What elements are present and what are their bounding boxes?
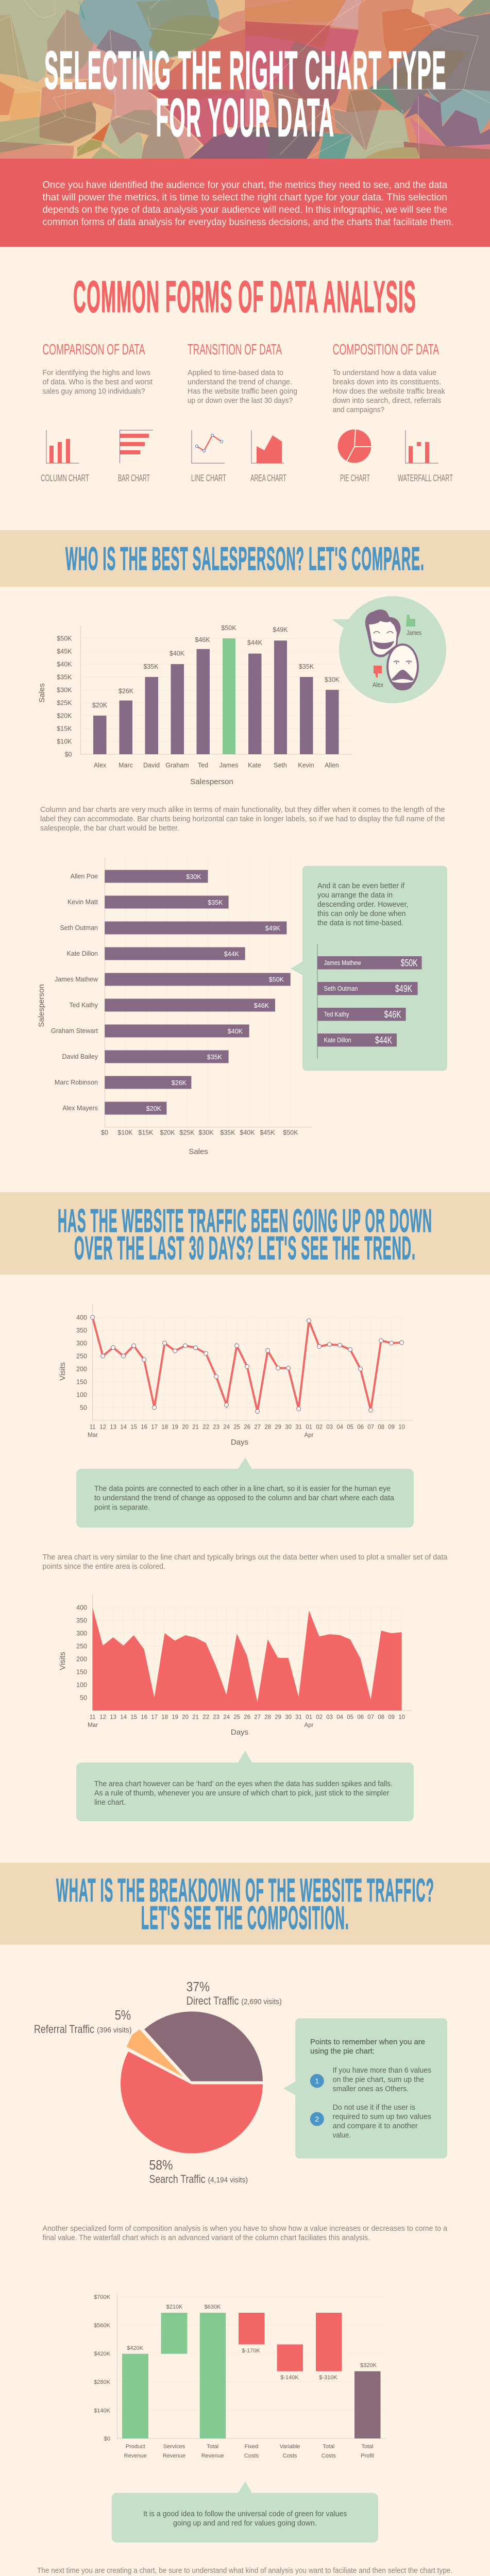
callout text: this can only be done when — [317, 909, 406, 918]
label: search traffic: (4,194 visits) — [208, 2176, 248, 2184]
line chart: visits per day: 300 — [76, 1340, 87, 1347]
area chart: visits per day — [58, 1595, 413, 1737]
area chart: visits per day: 12 — [99, 1715, 106, 1721]
column chart: sales by salesperson: Graham — [165, 761, 189, 769]
line chart: visits per day: 24 — [223, 1424, 230, 1430]
column chart: sales by salesperson: Allen — [325, 761, 339, 769]
area chart: visits per day: 100 — [76, 1682, 87, 1689]
line chart: visits per day: 13 — [110, 1424, 116, 1430]
area chart: visits per day: 300 — [76, 1630, 87, 1637]
column: comparison of data — [42, 342, 153, 396]
column: composition of data: How does the website traffic break — [333, 387, 445, 396]
column chart: sales by salesperson: $10K — [57, 738, 72, 745]
waterfall chart: revenue, costs and profit: $-170K — [242, 2348, 260, 2354]
area chart: visits per day: 20 — [182, 1715, 189, 1721]
column chart: sales by salesperson: $35K — [299, 663, 314, 670]
text: column vs bar comparison: label they can accommodate. Bar charts being horizontal can take in longer labels, so if we had to display the full name of the — [40, 815, 445, 823]
column: composition of data: down into search, direct, referrals — [333, 396, 441, 405]
waterfall chart: revenue, costs and profit: Costs — [244, 2453, 259, 2459]
line chart: visits per day: Days — [231, 1438, 248, 1447]
area chart: visits per day: 50 — [80, 1694, 87, 1701]
text: column vs bar comparison: salespeople, the bar chart would be better. — [40, 824, 179, 833]
column chart: sales by salesperson: $50K — [221, 624, 236, 632]
line chart: visits per day: 100 — [76, 1391, 87, 1398]
column chart: sales by salesperson: $49K — [273, 626, 288, 634]
icon: column chart — [41, 430, 89, 483]
label: direct traffic: (2,690 visits) — [241, 1997, 282, 2006]
waterfall chart: revenue, costs and profit: $420K — [127, 2345, 144, 2351]
line chart: visits per day — [58, 1304, 413, 1447]
text: area chart description: The area chart is very similar to the line chart and typically brings out the data better when used to plot a smaller set of data — [42, 1553, 448, 1562]
column chart: sales by salesperson: $46K — [195, 636, 210, 643]
callout: waterfall colour code: It is a good idea to follow the universal code of green for values — [143, 2510, 347, 2518]
bar chart: sales by full name — [37, 857, 311, 1156]
tip 2: value. — [333, 2131, 351, 2140]
tip 1 — [310, 2066, 431, 2093]
area chart: visits per day: 09 — [388, 1715, 395, 1721]
column: composition of data: breaks down into its constituents. — [333, 378, 441, 386]
area chart: visits per day: 17 — [151, 1715, 158, 1721]
tip 2: required to sum up two values — [333, 2112, 431, 2121]
waterfall chart: revenue, costs and profit: Services — [163, 2444, 185, 2450]
bar chart: sales by full name: $0 — [101, 1129, 108, 1137]
bar chart: sales by full name: $10K — [117, 1129, 133, 1137]
text: area chart description: points since the entire area is colored. — [42, 1562, 165, 1571]
bar chart: sales by full name: Graham Stewart — [51, 1027, 98, 1035]
line chart: visits per day: 350 — [76, 1327, 87, 1334]
mini sorted bar chart: $49K — [395, 984, 412, 994]
bar chart: sales by full name: $35K — [207, 1054, 223, 1061]
icon: area chart: AREA CHART — [250, 473, 286, 483]
area chart: visits per day: 15 — [130, 1715, 137, 1721]
bar chart: sales by full name: $40K — [228, 1028, 243, 1035]
area chart: visits per day: 10 — [398, 1715, 405, 1721]
bar chart: sales by full name: $30K — [186, 873, 201, 880]
callout heading: using the pie chart: — [310, 2047, 375, 2056]
column chart: sales by salesperson: $25K — [57, 700, 72, 707]
line chart: visits per day: 08 — [378, 1424, 384, 1430]
bar chart: sales by full name: $40K — [240, 1129, 255, 1137]
bar chart: sales by full name: $50K — [269, 976, 284, 983]
line chart: visits per day: 01 — [306, 1424, 312, 1430]
callout text: the data is not time-based. — [317, 919, 403, 927]
line chart: visits per day: 02 — [316, 1424, 323, 1430]
waterfall chart: revenue, costs and profit: Revenue — [163, 2453, 185, 2459]
waterfall chart: revenue, costs and profit: $210K — [166, 2304, 183, 2310]
column: transition of data — [188, 342, 297, 405]
callout: area chart caution: line chart. — [94, 1798, 126, 1807]
line chart: visits per day: 28 — [264, 1424, 271, 1430]
area chart: visits per day: 25 — [233, 1715, 240, 1721]
section band: traffic breakdown — [0, 1863, 490, 1944]
line chart: visits per day: 21 — [192, 1424, 199, 1430]
tip 1: on the pie chart, sum up the — [333, 2075, 424, 2084]
bar chart: sales by full name: $35K — [220, 1129, 235, 1137]
column chart: sales by salesperson: $45K — [57, 648, 72, 655]
title — [44, 41, 447, 148]
label: direct traffic — [187, 1979, 282, 2007]
line chart: visits per day: 400 — [76, 1314, 87, 1321]
column: comparison of data: of data. Who is the best and worst — [42, 378, 153, 386]
bar chart: sales by full name: $50K — [283, 1129, 298, 1137]
slice: direct traffic — [144, 2011, 263, 2081]
bar chart: sales by full name: Seth Outman — [60, 924, 98, 931]
column: composition of data — [333, 342, 445, 414]
callout text: you arrange the data in — [317, 891, 393, 900]
area chart: visits per day: 07 — [367, 1715, 374, 1721]
column chart: sales by salesperson: David — [143, 761, 160, 769]
column chart: sales by salesperson: $35K — [143, 663, 159, 670]
mini sorted bar chart: Ted Kathy — [324, 1010, 349, 1018]
area chart: visits per day: 250 — [76, 1642, 87, 1650]
waterfall chart: revenue, costs and profit: Product — [126, 2444, 145, 2450]
column chart: sales by salesperson: $35K — [57, 674, 72, 681]
column chart: sales by salesperson: $30K — [325, 676, 340, 683]
bar chart: sales by full name: $20K — [146, 1105, 162, 1112]
waterfall chart: revenue, costs and profit: Total — [361, 2444, 374, 2450]
bar chart: sales by full name: $20K — [160, 1129, 175, 1137]
column chart: sales by salesperson: Marc — [119, 761, 133, 769]
waterfall chart: revenue, costs and profit: $630K — [205, 2304, 221, 2310]
waterfall chart: revenue, costs and profit: $-310K — [319, 2375, 337, 2381]
label: direct traffic: Direct Traffic — [187, 1994, 239, 2007]
line chart: visits per day: 18 — [161, 1424, 168, 1430]
tip 1: 1 — [315, 2077, 319, 2085]
line chart: visits per day: 16 — [141, 1424, 147, 1430]
bar chart: sales by full name: Ted Kathy — [69, 1002, 98, 1009]
text: waterfall description: final value. The waterfall chart which is an advanced variant of the column chart faciliates this analysis. — [42, 2233, 370, 2242]
line chart: visits per day: 200 — [76, 1365, 87, 1372]
label: direct traffic: 37% — [187, 1979, 210, 1994]
column chart: sales by salesperson: $15K — [57, 725, 72, 733]
intro text: Once you have identified the audience for your chart, the metrics they need to see, and the data — [42, 180, 447, 191]
callout: waterfall colour code — [112, 2481, 378, 2543]
waterfall chart: revenue, costs and profit: $420K — [94, 2351, 111, 2357]
callout: line chart explanation — [76, 1458, 414, 1528]
area chart: visits per day: 23 — [213, 1715, 219, 1721]
line chart: visits per day: 17 — [151, 1424, 158, 1430]
icon: waterfall chart: WATERFALL CHART — [398, 473, 453, 483]
column chart: sales by salesperson: $0 — [65, 751, 72, 758]
column: transition of data: TRANSITION OF DATA — [188, 342, 282, 358]
intro text: depends on the type of data analysis your audience will need. In this infographic, we will see the — [42, 205, 447, 215]
area chart: visits per day: 19 — [172, 1715, 178, 1721]
icon: column chart: COLUMN CHART — [41, 473, 89, 483]
column chart: sales by salesperson: Seth — [274, 761, 287, 769]
line chart: visits per day: 11 — [90, 1424, 96, 1430]
waterfall chart: revenue, costs and profit: $320K — [360, 2363, 377, 2369]
area chart: visits per day: 400 — [76, 1604, 87, 1612]
tip 1: If you have more than 6 values — [333, 2066, 431, 2075]
waterfall chart: revenue, costs and profit: $0 — [104, 2436, 110, 2442]
waterfall chart: revenue, costs and profit: $140K — [94, 2408, 111, 2414]
line chart: visits per day: 05 — [347, 1424, 353, 1430]
bar chart: sales by full name: Sales — [189, 1147, 208, 1156]
label: Alex: Alex — [373, 681, 384, 688]
column chart: sales by salesperson: Kevin — [298, 761, 314, 769]
area chart: visits per day: 04 — [336, 1715, 344, 1721]
tip 2 — [310, 2103, 431, 2140]
line chart: visits per day: 03 — [326, 1424, 333, 1430]
waterfall chart: revenue, costs and profit: Fixed — [244, 2444, 258, 2450]
bar chart: sales by full name: Salesperson — [37, 984, 46, 1027]
column chart: sales by salesperson: $30K — [57, 686, 72, 693]
column: composition of data: To understand how a data value — [333, 368, 436, 377]
line chart: visits per day: 30 — [285, 1424, 292, 1430]
area chart: visits per day: 01 — [306, 1715, 312, 1721]
line chart: visits per day: 25 — [233, 1424, 240, 1430]
area chart: visits per day: 26 — [244, 1715, 250, 1721]
waterfall chart: revenue, costs and profit — [94, 2293, 386, 2459]
label: search traffic — [149, 2157, 248, 2185]
callout heading: Points to remember when you are — [310, 2038, 425, 2046]
bar chart: sales by full name: Alex Mayers — [62, 1105, 98, 1112]
callout text: descending order. However, — [317, 900, 408, 909]
icon: pie chart — [338, 429, 372, 483]
bar chart: sales by full name: David Bailey — [62, 1053, 98, 1060]
mini sorted bar chart: $50K — [401, 958, 418, 969]
icon: Alex bearded face — [386, 643, 419, 690]
area chart: visits per day: 28 — [264, 1715, 271, 1721]
callout: line chart explanation: to understand the trend of change as opposed to the column and bar chart where each data — [94, 1494, 395, 1502]
area chart: visits per day: 16 — [141, 1715, 147, 1721]
mini sorted bar chart: James Mathew — [324, 959, 361, 967]
callout: pie chart tips — [283, 2019, 447, 2159]
intro text: common forms of data analysis for everyday business decisions, and the charts that facilitate them. — [42, 217, 453, 228]
column: comparison of data: sales guy among 10 individuals? — [42, 387, 145, 396]
bar chart: sales by full name: $35K — [208, 899, 223, 906]
icon: line chart: LINE CHART — [191, 473, 226, 483]
text: area chart description — [42, 1553, 448, 1571]
label: referral traffic: Referral Traffic — [34, 2023, 94, 2036]
callout: area chart caution: The area chart however can be ‘hard’ on the eyes when the data has sudden spikes and falls. — [94, 1780, 393, 1788]
line chart: visits per day: 15 — [130, 1424, 137, 1430]
line chart: visits per day: 20 — [182, 1424, 189, 1430]
bar chart: sales by full name: $49K — [265, 925, 281, 932]
area chart: visits per day: 24 — [223, 1715, 230, 1721]
label: referral traffic — [34, 2007, 132, 2036]
callout text — [317, 882, 408, 927]
label: search traffic: Search Traffic — [149, 2173, 205, 2185]
area chart: visits per day: 27 — [254, 1715, 261, 1721]
waterfall chart: revenue, costs and profit: Revenue — [124, 2453, 147, 2459]
section band: who is the best salesperson — [0, 530, 490, 587]
bar chart: sales by full name: $44K — [224, 951, 240, 958]
icon: James smiling face — [365, 609, 401, 657]
icon: pie chart: PIE CHART — [340, 473, 370, 483]
icon: area chart — [250, 430, 286, 483]
icon: line chart — [191, 430, 226, 483]
area chart: visits per day: 22 — [202, 1715, 209, 1721]
column chart: sales by salesperson: Sales — [38, 683, 46, 703]
intro text — [42, 180, 453, 228]
line chart: visits per day: 29 — [275, 1424, 281, 1430]
line chart: visits per day: 250 — [76, 1353, 87, 1360]
waterfall chart: revenue, costs and profit: Total — [323, 2444, 334, 2450]
callout: line chart explanation: The data points are connected to each other in a line chart, so it is easier for the human eye — [94, 1484, 391, 1493]
icon: thumbs up — [406, 615, 415, 626]
waterfall chart: revenue, costs and profit: Variable — [280, 2444, 300, 2450]
area chart: visits per day: 150 — [76, 1668, 87, 1675]
waterfall chart: revenue, costs and profit: Revenue — [201, 2453, 224, 2459]
column chart: sales by salesperson: $20K — [92, 702, 108, 709]
callout heading — [310, 2038, 425, 2056]
tip 2: Do not use it if the user is — [333, 2103, 415, 2112]
waterfall chart: revenue, costs and profit: $560K — [94, 2323, 111, 2329]
column: comparison of data: COMPARISON OF DATA — [42, 342, 145, 358]
callout: area chart caution: As a rule of thumb, whenever you are unsure of which chart to pick, just stick to the simpler — [94, 1789, 390, 1798]
line chart: visits per day: 09 — [388, 1424, 395, 1430]
label: James: James — [407, 630, 421, 637]
area chart: visits per day: 21 — [192, 1715, 199, 1721]
speech bubble: best and worst salesperson faces — [332, 596, 446, 703]
line chart: visits per day: 23 — [213, 1424, 219, 1430]
bar chart: sales by full name: $26K — [172, 1079, 187, 1087]
area chart: visits per day: Days — [231, 1728, 248, 1737]
line chart: visits per day: 10 — [398, 1424, 405, 1430]
bar chart: sales by full name: James Mathew — [55, 976, 98, 983]
icon: waterfall chart — [398, 430, 453, 483]
area chart: visits per day: 200 — [76, 1656, 87, 1663]
mini sorted bar chart: $44K — [375, 1036, 392, 1046]
bar chart: sales by full name: $25K — [179, 1129, 195, 1137]
label: referral traffic: (396 visits) — [97, 2026, 132, 2035]
area chart: visits per day: Apr — [305, 1722, 314, 1728]
column: comparison of data: For identifying the highs and lows — [42, 368, 150, 377]
column chart: sales by salesperson: $26K — [119, 687, 134, 694]
bar chart: sales by full name: Allen Poe — [70, 873, 98, 880]
bar chart: sales by full name: Kevin Matt — [67, 899, 98, 906]
label: search traffic: 58% — [149, 2157, 173, 2173]
area chart: visits per day: 350 — [76, 1617, 87, 1624]
slice: referral traffic — [127, 2029, 183, 2077]
area chart: visits per day: 08 — [378, 1715, 384, 1721]
area chart: visits per day: 13 — [110, 1715, 116, 1721]
area chart: visits per day: 29 — [275, 1715, 281, 1721]
column chart: sales by salesperson: $40K — [57, 660, 72, 668]
text: closing remark: The next time you are creating a chart, be sure to understand what kind of analysis you want to faciliate and then select the chart type. — [37, 2566, 452, 2575]
area chart: visits per day: 06 — [357, 1715, 364, 1721]
callout text: And it can be even better if — [317, 882, 405, 890]
tip 2: 2 — [315, 2115, 319, 2123]
line chart: visits per day: 19 — [172, 1424, 178, 1430]
bar chart: sales by full name: $46K — [254, 1002, 269, 1009]
column chart: sales by salesperson: Salesperson — [190, 777, 233, 786]
mini sorted bar chart: $46K — [384, 1010, 401, 1020]
header: abstract polygon background with title — [0, 0, 490, 160]
intro text: that will power the metrics, it is time to select the right chart type for your data. This selection — [42, 192, 447, 203]
bar chart: sales by full name: $15K — [138, 1129, 154, 1137]
text: waterfall description: Another specialized form of composition analysis is when you have to show how a value increases or decreases to come to a — [42, 2224, 448, 2233]
column chart: sales by salesperson — [38, 624, 351, 786]
line chart: visits per day: 22 — [202, 1424, 209, 1430]
area chart: visits per day: 14 — [120, 1715, 127, 1721]
line chart: visits per day: 06 — [357, 1424, 364, 1430]
column chart: sales by salesperson: James — [219, 761, 238, 769]
line chart: visits per day: 150 — [76, 1379, 87, 1386]
text: waterfall description — [42, 2224, 448, 2242]
mini sorted bar chart: Seth Outman — [324, 985, 358, 992]
line chart: visits per day: 31 — [295, 1424, 302, 1430]
column: composition of data: and campaigns? — [333, 405, 384, 414]
icon: bar chart: BAR CHART — [118, 473, 150, 483]
line chart: visits per day: 50 — [80, 1404, 87, 1412]
line chart: visits per day: 14 — [120, 1424, 127, 1430]
icon: bar chart — [118, 430, 153, 483]
bar chart: sales by full name: $30K — [198, 1129, 214, 1137]
tip 1: smaller ones as Others. — [333, 2084, 409, 2093]
column: transition of data: Has the website traffic been going — [188, 387, 297, 396]
section band: website traffic trend — [0, 1192, 490, 1275]
icon: thumbs down — [374, 666, 382, 677]
waterfall chart: revenue, costs and profit: Profit — [361, 2453, 374, 2459]
line chart: visits per day: 27 — [254, 1424, 261, 1430]
column: transition of data: up or down over the last 30 days? — [188, 396, 293, 405]
text: column vs bar comparison: Column and bar charts are very much alike in terms of main functionality, but they differ when it comes to the length of the — [40, 805, 445, 814]
waterfall chart: revenue, costs and profit: $700K — [94, 2294, 111, 2300]
slice: search traffic — [121, 2052, 263, 2154]
area chart: visits per day: 11 — [90, 1715, 96, 1721]
area chart: visits per day: 05 — [347, 1715, 353, 1721]
mini sorted bar chart — [317, 944, 422, 1058]
waterfall chart: revenue, costs and profit: $280K — [94, 2379, 111, 2385]
line chart: visits per day: 26 — [244, 1424, 250, 1430]
area chart: visits per day: 03 — [326, 1715, 333, 1721]
tip 2: and compare it to another — [333, 2122, 418, 2130]
line chart: visits per day: 07 — [367, 1424, 374, 1430]
waterfall chart: revenue, costs and profit: $-140K — [280, 2375, 299, 2381]
waterfall chart: revenue, costs and profit: Total — [207, 2444, 218, 2450]
column chart: sales by salesperson: $44K — [247, 639, 263, 646]
column: transition of data: understand the trend of change. — [188, 378, 292, 386]
area chart: visits per day: Visits — [58, 1652, 67, 1670]
callout: waterfall colour code: going up and and red for values going down. — [173, 2519, 317, 2528]
area chart: visits per day: 31 — [295, 1715, 302, 1721]
line chart: visits per day: Mar — [88, 1432, 98, 1438]
line chart: visits per day: Apr — [305, 1432, 314, 1438]
line chart: visits per day: Visits — [58, 1362, 67, 1381]
line chart: visits per day: 12 — [99, 1424, 106, 1430]
label: referral traffic: 5% — [115, 2007, 131, 2023]
intro band — [0, 159, 490, 247]
column chart: sales by salesperson: $40K — [170, 650, 185, 657]
area chart: visits per day: 18 — [161, 1715, 168, 1721]
area chart: visits per day: 30 — [285, 1715, 292, 1721]
area chart: visits per day: 02 — [316, 1715, 323, 1721]
waterfall chart: revenue, costs and profit: Costs — [322, 2453, 336, 2459]
bar chart: sales by full name: $45K — [260, 1129, 275, 1137]
text: column vs bar comparison — [40, 805, 445, 833]
bar chart: sales by full name: Marc Robinson — [55, 1079, 98, 1086]
area chart: visits per day: Mar — [88, 1722, 98, 1728]
column chart: sales by salesperson: $20K — [57, 712, 72, 719]
callout: descending order bar chart — [291, 866, 447, 1071]
column chart: sales by salesperson: Ted — [198, 761, 208, 769]
waterfall chart: revenue, costs and profit: Costs — [282, 2453, 297, 2459]
mini sorted bar chart: Kate Dillon — [324, 1036, 351, 1044]
line chart: visits per day: 04 — [336, 1424, 344, 1430]
column chart: sales by salesperson: Alex — [94, 761, 107, 769]
callout: line chart explanation: point is separate. — [94, 1503, 150, 1512]
pie chart: traffic composition — [34, 1979, 282, 2185]
bar chart: sales by full name: Kate Dillon — [67, 950, 98, 957]
column chart: sales by salesperson: Kate — [248, 761, 261, 769]
callout: area chart caution — [76, 1751, 414, 1821]
column chart: sales by salesperson: $50K — [57, 635, 72, 642]
column: transition of data: Applied to time-based data to — [188, 368, 283, 377]
